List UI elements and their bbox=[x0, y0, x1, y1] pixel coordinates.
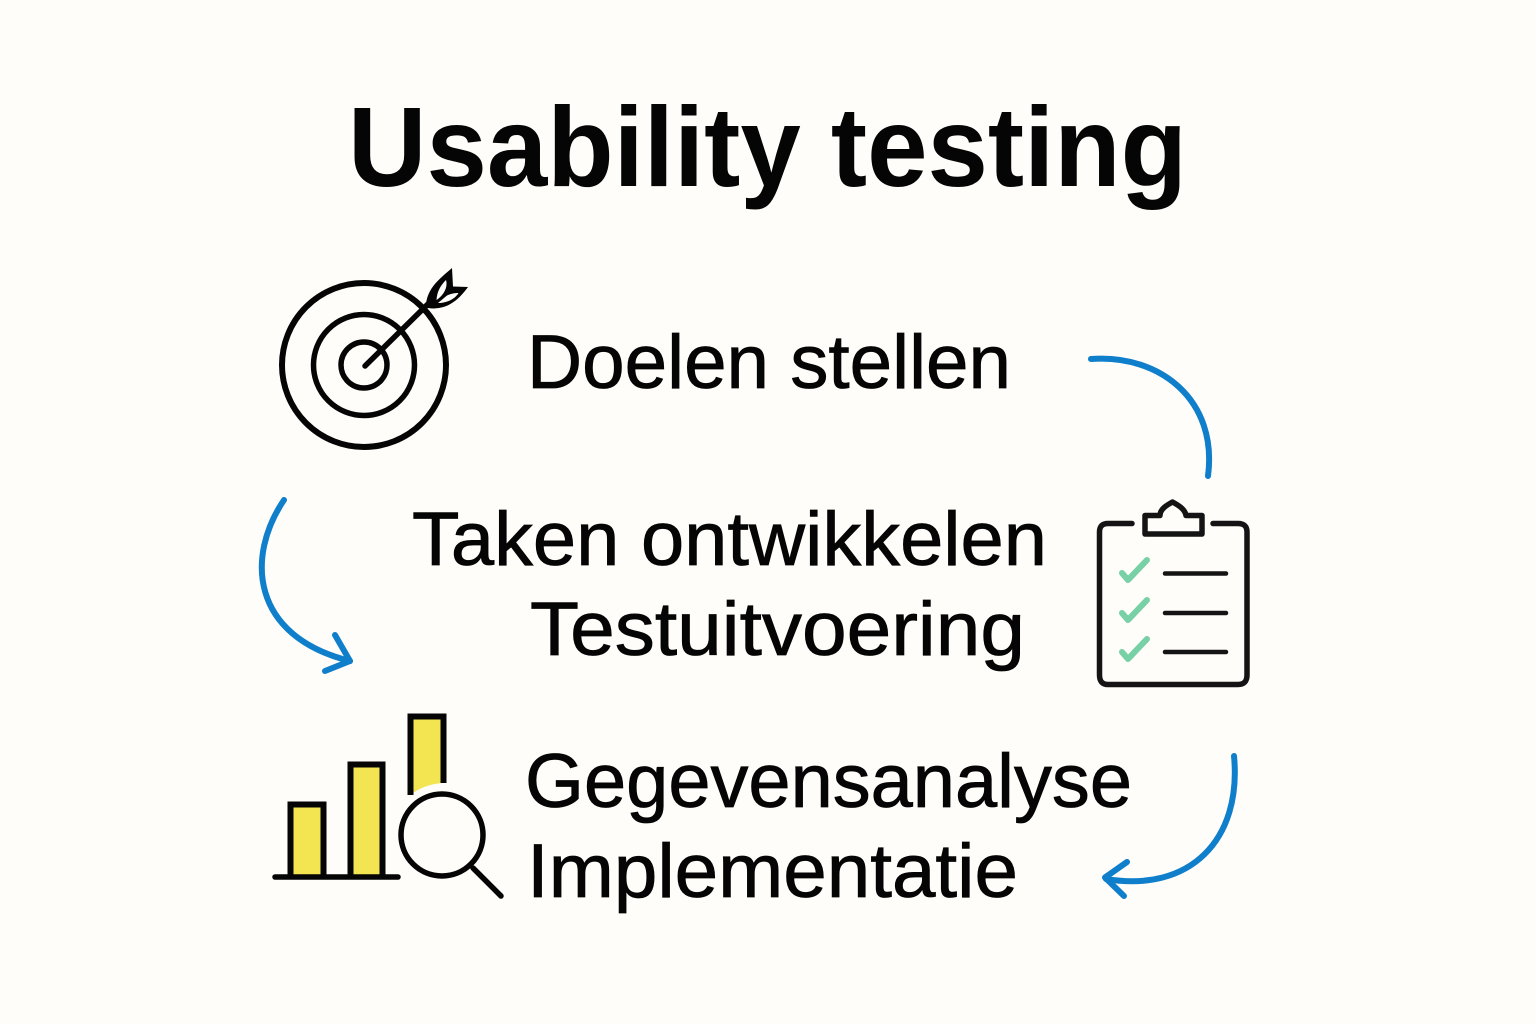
step text: Doelen stellen: Doelen stellen bbox=[527, 320, 1011, 405]
icon: clipboard checklist bbox=[1100, 502, 1247, 684]
icon: bar chart with magnifier bbox=[275, 716, 501, 896]
clipboard board bbox=[1100, 524, 1247, 684]
step text: Gegevensanalyse: Gegevensanalyse bbox=[525, 739, 1132, 824]
arrow: goals to clipboard bbox=[1091, 359, 1209, 476]
bars bbox=[290, 716, 444, 877]
icon: target with arrow bbox=[282, 268, 468, 447]
step text: Testuitvoering: Testuitvoering bbox=[530, 587, 1025, 672]
arrow: curved to chart bbox=[262, 500, 350, 671]
step text: Implementatie: Implementatie bbox=[527, 829, 1018, 914]
magnifier bbox=[401, 794, 501, 896]
arrow: clipboard to implementation bbox=[1105, 756, 1235, 896]
baseline bbox=[275, 874, 398, 880]
check marks bbox=[1122, 560, 1147, 659]
clipboard clip bbox=[1145, 502, 1202, 534]
title: Usability testing bbox=[348, 84, 1187, 210]
checklist lines bbox=[1165, 574, 1226, 652]
step text: Taken ontwikkelen: Taken ontwikkelen bbox=[412, 497, 1047, 582]
